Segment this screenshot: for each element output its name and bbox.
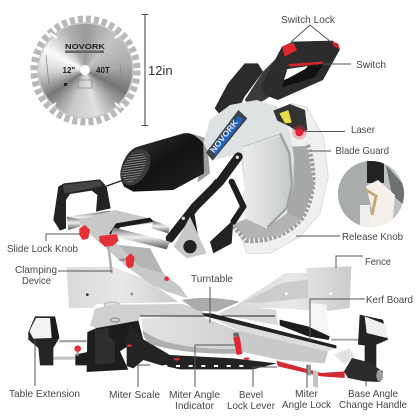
- callout labels: Indicator: [175, 400, 214, 412]
- callout labels: Kerf Board: [366, 294, 413, 306]
- clamp foot: [104, 302, 120, 308]
- callout labels: Slide Lock Knob: [7, 243, 78, 255]
- callout labels: Blade Guard: [336, 145, 389, 157]
- callout labels: Bevel: [239, 389, 263, 401]
- callout labels: Change Handle: [339, 399, 407, 411]
- miter scale ring: [127, 323, 277, 369]
- brand badge: [206, 110, 247, 161]
- right table extension: [331, 315, 388, 368]
- callout labels: Angle Lock: [282, 399, 332, 411]
- callout labels: Turntable: [191, 273, 233, 285]
- icon: saw blade disc: [38, 23, 133, 118]
- pivot linkage arm: [170, 156, 243, 258]
- clear blade guard, blade and covers: NOVORK: [208, 118, 240, 155]
- sliding grip, carriage and rails: [53, 179, 188, 298]
- callout labels: Clamping: [15, 264, 57, 276]
- base angle handle and miter lock: [276, 348, 383, 388]
- main handle with switch lock and switch: [261, 41, 340, 100]
- dimension line: 12in: [142, 14, 173, 126]
- red indicator: [233, 336, 242, 355]
- callout labels: Switch: [356, 59, 386, 71]
- callout labels: Release Knob: [342, 231, 403, 243]
- dimension line: 12in: 12in: [148, 63, 173, 78]
- table insert and kerf board: [201, 313, 336, 363]
- blade body: [233, 146, 314, 238]
- right fence plate: [218, 266, 351, 340]
- callout labels: Switch Lock: [281, 14, 336, 26]
- callout labels: Fence: [365, 256, 391, 268]
- clear guard: [233, 103, 328, 253]
- callout labels: Base Angle: [348, 388, 398, 400]
- red lock knobs: [79, 225, 169, 281]
- callout labels: Device: [22, 275, 51, 287]
- leader lines: [35, 25, 366, 388]
- left table extension: [28, 316, 87, 365]
- inset photo: release knob detail: [338, 161, 404, 227]
- saw base left housing: [75, 304, 208, 372]
- saw blade teeth and markings: NOVORK: [65, 42, 106, 51]
- saw blade teeth and markings: 12": [62, 66, 75, 75]
- turntable disc: [142, 315, 243, 354]
- turntable and miter scale: [127, 298, 277, 369]
- callout labels: Miter: [295, 388, 318, 400]
- rear support handle: [215, 57, 278, 118]
- callout labels: Laser: [351, 124, 375, 136]
- callout labels: Miter Scale: [109, 389, 160, 401]
- callout labels: Lock Lever: [227, 400, 275, 412]
- yellow label and laser housing: [273, 104, 307, 133]
- clear blade guard, blade and covers: [203, 100, 328, 253]
- callout labels: Miter Angle: [169, 389, 220, 401]
- upper cover: [203, 100, 294, 228]
- callout labels: Table Extension: [9, 388, 80, 400]
- saw blade teeth and markings: [34, 20, 136, 122]
- left fence plate: [67, 267, 178, 308]
- motor housing: [107, 133, 210, 192]
- saw blade teeth and markings: 40T: [96, 66, 110, 75]
- blade teeth: [233, 145, 313, 240]
